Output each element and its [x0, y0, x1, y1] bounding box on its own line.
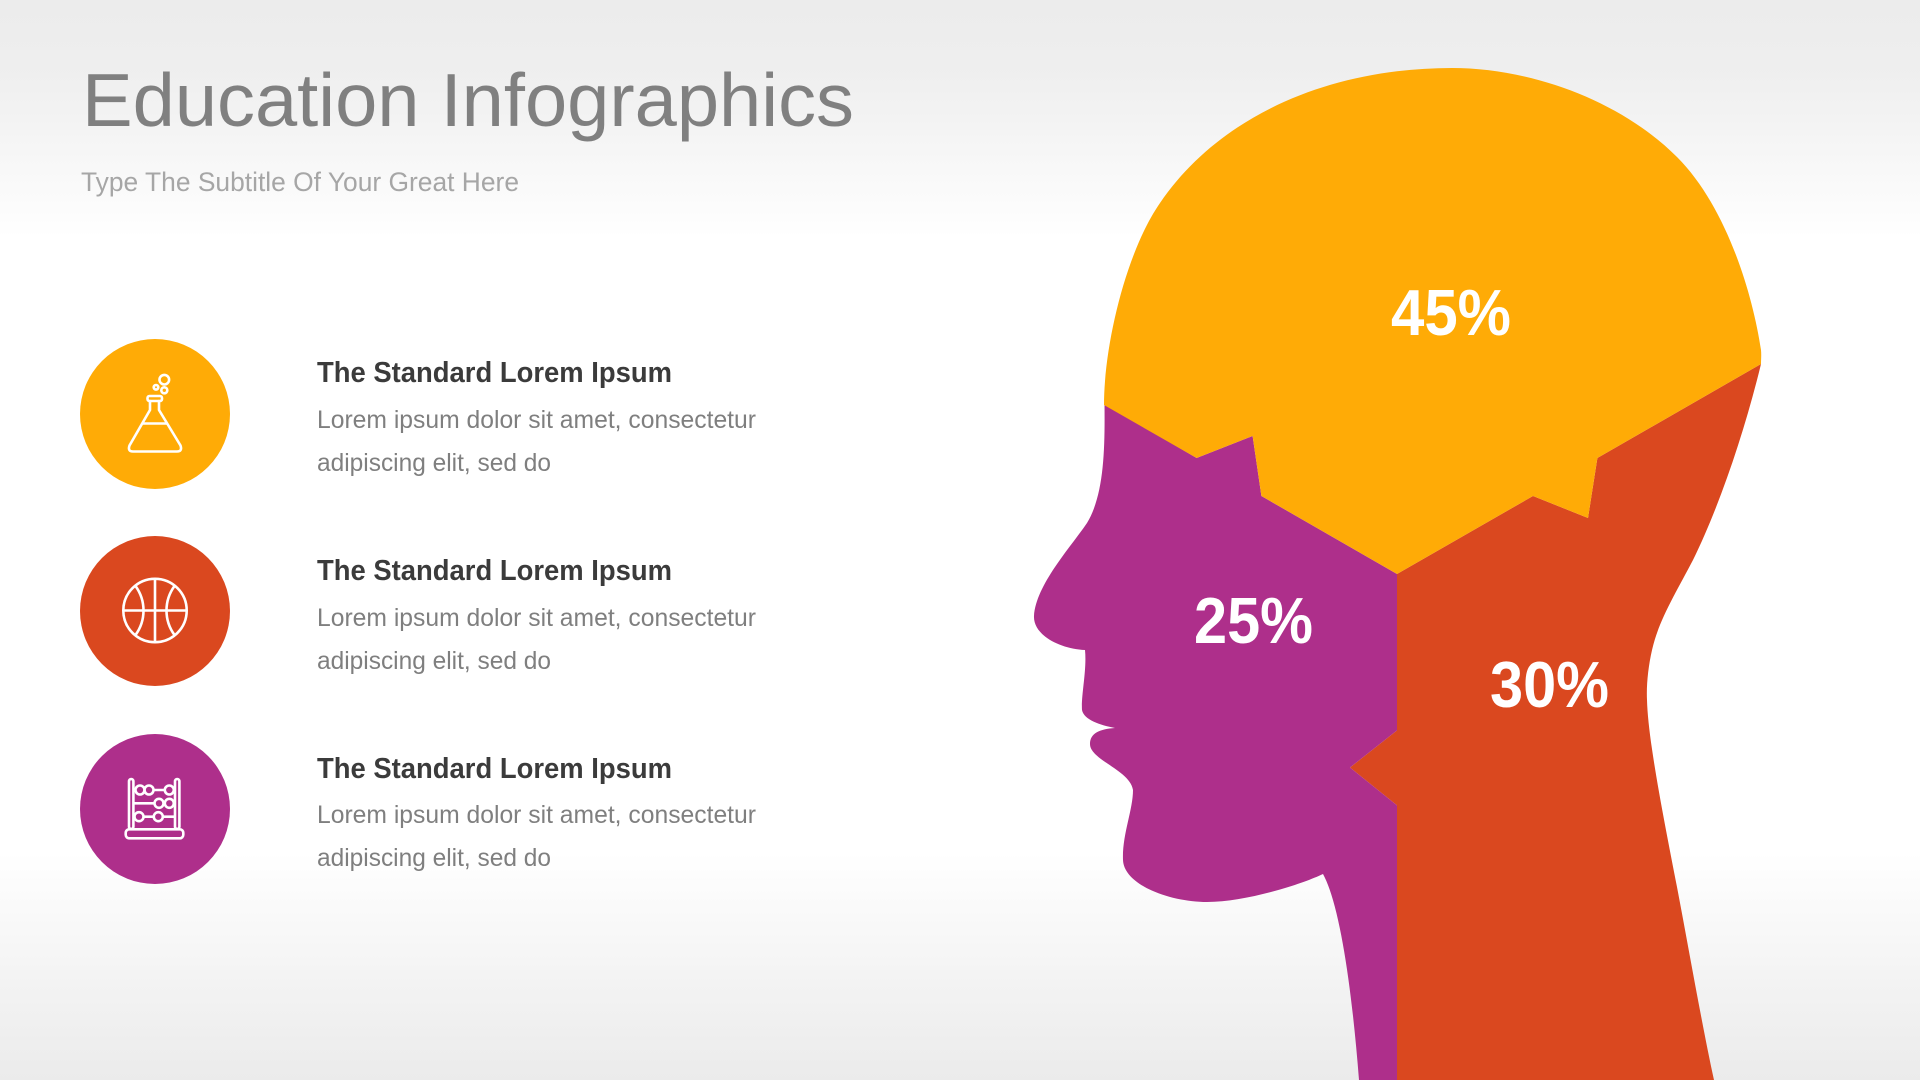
icon: abacus in purple circle	[80, 734, 230, 884]
label 45%: 45%	[1391, 276, 1511, 349]
head segment: orange 30%	[1350, 364, 1761, 1080]
body text: Lorem ipsum dolor sit amet, consectetur	[317, 604, 756, 632]
body text	[317, 604, 756, 675]
heading: The Standard Lorem Ipsum	[317, 357, 672, 389]
head segment: purple 25%	[1034, 404, 1397, 1080]
body text: adipiscing elit, sed do	[317, 449, 551, 477]
subtitle: Type The Subtitle Of Your Great Here	[81, 167, 519, 197]
item: abacus	[80, 734, 756, 884]
body text	[317, 406, 756, 477]
heading: The Standard Lorem Ipsum	[317, 555, 672, 587]
icon: basketball in orange circle	[80, 536, 230, 686]
body text: adipiscing elit, sed do	[317, 844, 551, 872]
body text: Lorem ipsum dolor sit amet, consectetur	[317, 801, 756, 829]
body text: adipiscing elit, sed do	[317, 647, 551, 675]
icon: flask in yellow circle	[80, 339, 230, 489]
item: flask	[80, 339, 756, 489]
label 30%: 30%	[1490, 648, 1609, 721]
heading: The Standard Lorem Ipsum	[317, 753, 672, 785]
title: Education Infographics	[82, 58, 854, 142]
head segment: yellow 45%	[1104, 68, 1761, 574]
label 25%: 25%	[1194, 584, 1313, 657]
item: basketball	[80, 536, 756, 686]
body text	[317, 801, 756, 872]
body text: Lorem ipsum dolor sit amet, consectetur	[317, 406, 756, 434]
head diagram	[1034, 68, 1761, 1080]
